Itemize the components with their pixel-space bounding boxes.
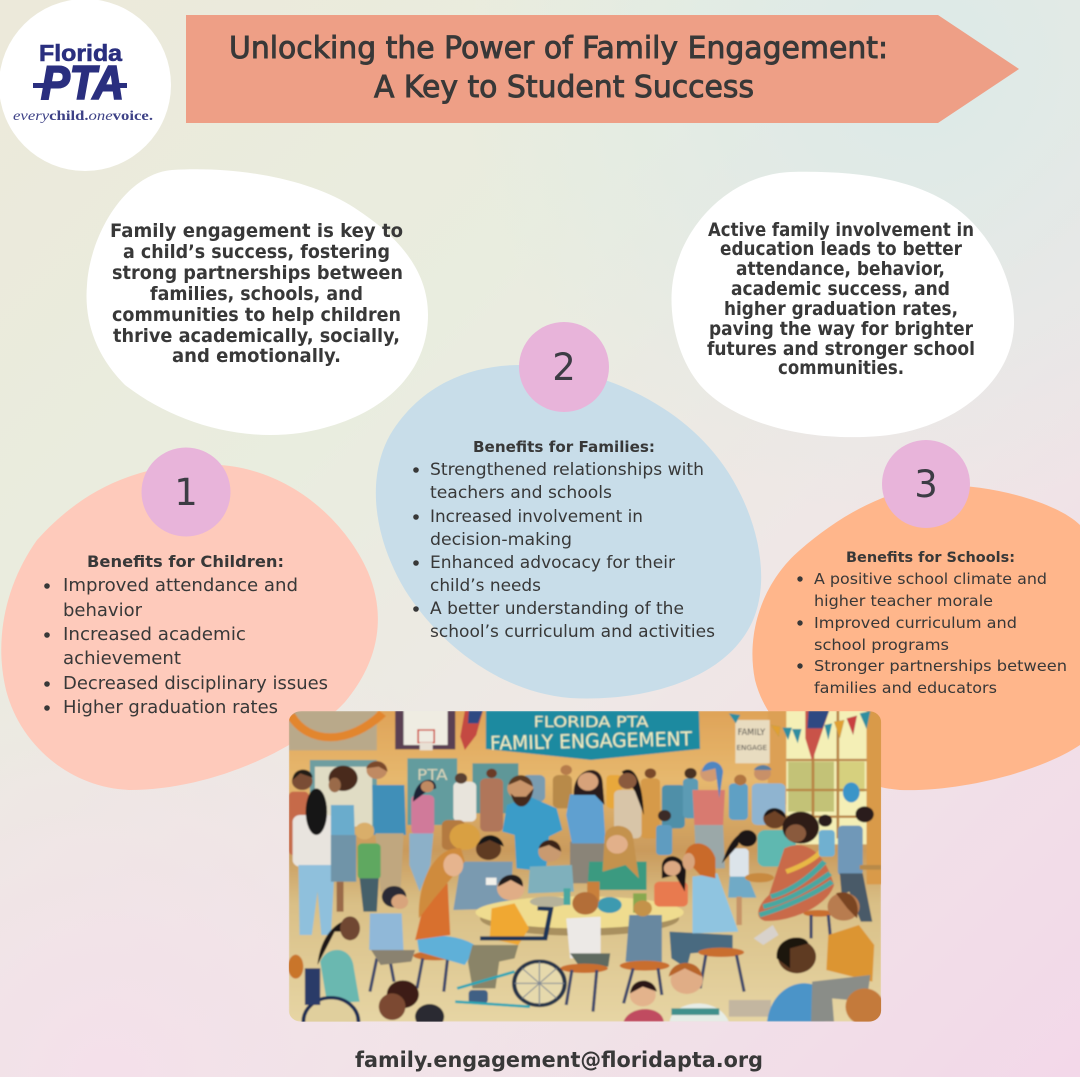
illustration: family engagement event: FLORIDA PTA [534, 713, 649, 731]
logo: Florida PTA: every child. one voice. [13, 109, 153, 124]
panel: intro left: families, schools, and [150, 283, 363, 305]
title: Unlocking the Power of Family Engagement: [229, 31, 888, 66]
windows [786, 711, 867, 844]
illustration: family engagement event: PTA [417, 766, 448, 784]
badge 3: 3 [914, 463, 938, 506]
person: girl braids [303, 916, 360, 1046]
person: seated man teal [758, 808, 796, 867]
person: woman blue [566, 770, 606, 883]
panel: benefits for families: A better understanding of the [430, 599, 684, 618]
panel: benefits for families: school’s curriculum and activities [430, 622, 715, 641]
badge 3 [882, 440, 970, 528]
panel: benefits for families: Benefits for Families: [473, 438, 655, 456]
panel: intro right: communities. [778, 357, 904, 379]
doors [310, 760, 377, 827]
panel: benefits for families: teachers and schools [430, 483, 612, 502]
person: woman green [587, 826, 647, 890]
badge 2 [519, 322, 609, 412]
panel: intro right: academic success, and [731, 278, 950, 300]
person: right kids [818, 806, 881, 922]
contact email: family.engagement@floridapta.org [355, 1048, 763, 1072]
person: girl right of table [654, 856, 688, 907]
panel: benefits for children: Benefits for Children: [87, 552, 284, 571]
person: man back right [752, 765, 785, 825]
badge 2: 2 [552, 346, 576, 389]
panel: benefits for families: Increased involvement in [430, 507, 643, 526]
right flag and bunting [805, 711, 829, 761]
logo: Florida PTA: Florida [39, 40, 122, 66]
poster [735, 720, 770, 763]
panel: benefits for schools: higher teacher morale [814, 592, 993, 610]
panel: benefits for schools: Benefits for Schools: [846, 550, 1015, 566]
person: kid blue left [369, 886, 415, 965]
person: boy seated back [528, 840, 574, 893]
backboard [395, 711, 455, 749]
panel: benefits for children: Improved attendance and [63, 576, 298, 596]
person: adult orange hair [670, 843, 738, 968]
person: kids back at table [566, 892, 662, 967]
panel: benefits for schools: families and educators [814, 679, 997, 697]
flag [460, 711, 483, 750]
panel: benefits for families: decision-making [430, 530, 572, 549]
background crowd [442, 765, 748, 855]
badge 1: 1 [174, 471, 198, 514]
panel: benefits for schools: school programs [814, 636, 949, 654]
panel: benefits for families: Enhanced advocacy for their [430, 553, 675, 572]
panel: intro left: thrive academically, socially, [113, 325, 400, 347]
illustration: family engagement event [288, 711, 884, 1046]
panel: intro left: a child’s success, fostering [123, 241, 390, 263]
panel: benefits for schools: Improved curriculum and [814, 614, 1017, 632]
panel: benefits for families: child’s needs [430, 576, 541, 595]
balloon [843, 782, 860, 802]
logo: Florida PTA [0, 0, 171, 171]
panel: intro right: Active family involvement in [708, 219, 974, 241]
person: left man [289, 770, 313, 855]
people: bottom foreground [288, 892, 884, 1029]
panel: intro right: paving the way for brighter [709, 318, 974, 340]
panel: benefits for children: Increased academic [63, 625, 246, 645]
illustration: family engagement event: FAMILY ENGAGEMENT [490, 728, 693, 755]
person: red haired woman [415, 848, 476, 965]
panel: benefits for schools: A positive school climate and [814, 570, 1047, 588]
title: A Key to Student Success [374, 70, 754, 105]
badge 1 [142, 448, 230, 536]
panel: intro left [87, 169, 428, 435]
person: man centre seated [453, 835, 513, 910]
panel: intro left: and emotionally. [172, 345, 341, 367]
illustration: family engagement event: FAMILY [738, 728, 765, 738]
person: woman pink [409, 780, 436, 892]
panel: intro right: futures and stronger school [707, 338, 975, 360]
panel: benefits for children: Decreased disciplinary issues [63, 674, 328, 694]
person: woman blue tank [329, 766, 358, 912]
panel: benefits for children: achievement [63, 649, 181, 669]
panel: intro right [671, 172, 1014, 437]
panel: intro left: Family engagement is key to [110, 220, 403, 242]
person: woman tan [614, 770, 644, 838]
person: kid green [355, 823, 381, 912]
panel: benefits for children: Higher graduation rates [63, 698, 278, 718]
panel: benefits for families [376, 322, 761, 698]
title arrow banner [186, 15, 1019, 123]
person: woman back view [293, 788, 335, 935]
panel: intro right: attendance, behavior, [736, 258, 945, 280]
person: woman pink scarf [692, 762, 725, 868]
illustration: family engagement event: ENGAGE [736, 743, 768, 752]
person: man blue shirt [366, 761, 406, 892]
person: girl ponytail [722, 830, 774, 925]
panel: benefits for schools [752, 440, 1080, 790]
panel: benefits for children [1, 448, 378, 790]
panel: benefits for children: behavior [63, 601, 143, 621]
logo: Florida PTA: PTA [41, 56, 124, 109]
stools [370, 910, 834, 1012]
panel: benefits for schools: Stronger partnerships between [814, 657, 1067, 675]
banner [486, 711, 700, 760]
centre table [476, 882, 684, 936]
panel: benefits for families: Strengthened relationships with [430, 460, 704, 479]
panel: intro left: communities to help children [112, 304, 401, 326]
panel: intro right: higher graduation rates, [724, 298, 958, 320]
person: boy in wheelchair [455, 875, 565, 1007]
person: bearded man [502, 775, 562, 872]
panel: intro left: strong partnerships between [112, 262, 403, 284]
mural [289, 711, 377, 750]
panel: intro right: education leads to better [720, 238, 963, 260]
person: woman afro striped dress [754, 812, 834, 945]
